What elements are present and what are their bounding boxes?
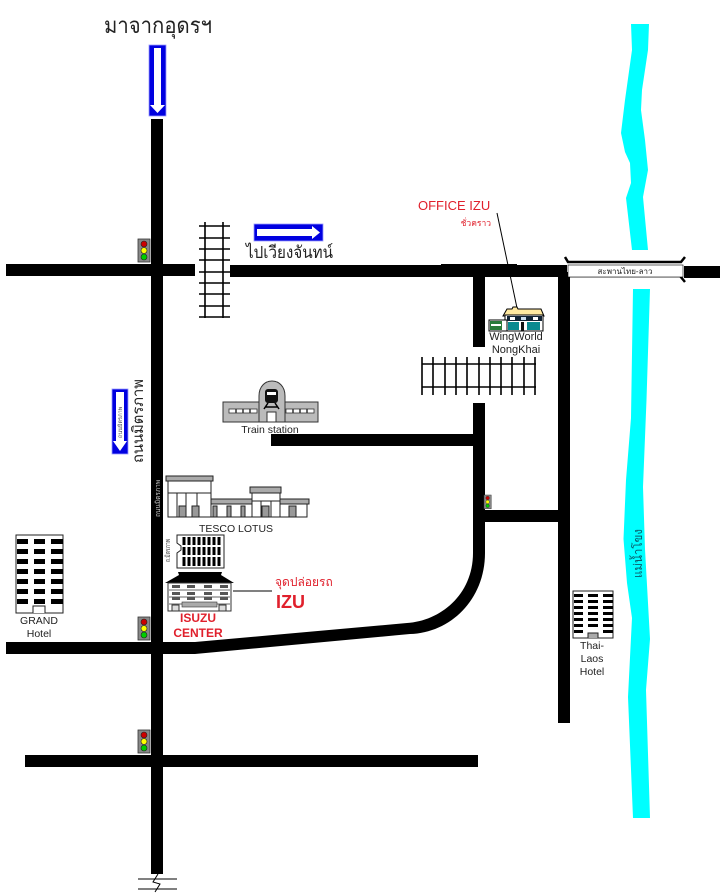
- road break symbol: [138, 874, 177, 892]
- railway crossing east: [422, 357, 536, 395]
- label: road name on road: ถนนมิตรภาพ: [154, 480, 162, 517]
- label: to Vientiane: ไปเวียงจันทน์: [244, 242, 333, 262]
- building: Thai-Laos Hotel: [573, 591, 613, 638]
- label: office IZU: OFFICE IZU: [418, 198, 490, 213]
- traffic light: lower junction: [138, 617, 150, 640]
- building: train station: [223, 381, 318, 422]
- Isuzu leader line: [233, 590, 272, 592]
- label: Thai-Laos Hotel: Thai-: [580, 640, 604, 652]
- arrow: to Ban Phue: ถนนมิตรภาพ: [117, 406, 124, 438]
- building: block near Isuzu: [177, 535, 224, 568]
- river: [621, 24, 650, 818]
- label: Isuzu center: CENTER: [173, 626, 223, 640]
- heading: from Udon: มาจากอุดรฯ: [104, 13, 212, 39]
- label: Tesco Lotus: TESCO LOTUS: [199, 523, 273, 535]
- label: soi rotated: ถ.มิตรภาพ: [164, 539, 172, 562]
- label: Isuzu center: ISUZU: [180, 611, 216, 625]
- arrow: east: [254, 224, 323, 241]
- building: Isuzu center: [165, 572, 234, 611]
- building: WingWorld: [489, 307, 544, 331]
- label: rotated road name: ถนนมิตรภาพ: [130, 379, 147, 463]
- label: Thai-Laos Hotel: Hotel: [580, 666, 604, 678]
- label: WingWorld NongKhai: WingWorld: [489, 331, 543, 343]
- label: Mekong river: แม่น้ำโขง: [629, 529, 645, 578]
- building: Grand Hotel: [16, 535, 63, 613]
- arrow: south: [149, 45, 166, 116]
- label: Thai-Laos Hotel: [580, 640, 604, 678]
- railway crossing north: [199, 222, 230, 318]
- label: WingWorld NongKhai: [489, 331, 543, 356]
- traffic light: east road: [484, 495, 491, 509]
- traffic light: south junction: [138, 730, 150, 753]
- label: Grand Hotel: GRAND: [20, 615, 58, 627]
- label: Grand Hotel: Hotel: [27, 628, 51, 640]
- arrow: to Ban Phue: [112, 389, 128, 454]
- label: office IZU: [418, 198, 491, 228]
- label: IZU drop point: [275, 575, 333, 612]
- building: Tesco Lotus: [166, 476, 309, 517]
- label: Isuzu center: [173, 611, 223, 640]
- bridge: สะพานไทย-ลาว: [598, 267, 652, 276]
- label: IZU drop point: IZU: [276, 592, 305, 612]
- label: office IZU: ชั่วคราว: [461, 217, 491, 228]
- traffic light: top junction: [138, 239, 150, 262]
- bridge: [565, 257, 685, 282]
- label: train station: Train station: [241, 424, 299, 436]
- label: WingWorld NongKhai: NongKhai: [492, 344, 540, 356]
- label: Thai-Laos Hotel: Laos: [581, 653, 603, 665]
- office leader line: [497, 213, 517, 308]
- label: IZU drop point: จุดปล่อยรถ: [275, 575, 333, 590]
- label: Grand Hotel: [20, 615, 58, 640]
